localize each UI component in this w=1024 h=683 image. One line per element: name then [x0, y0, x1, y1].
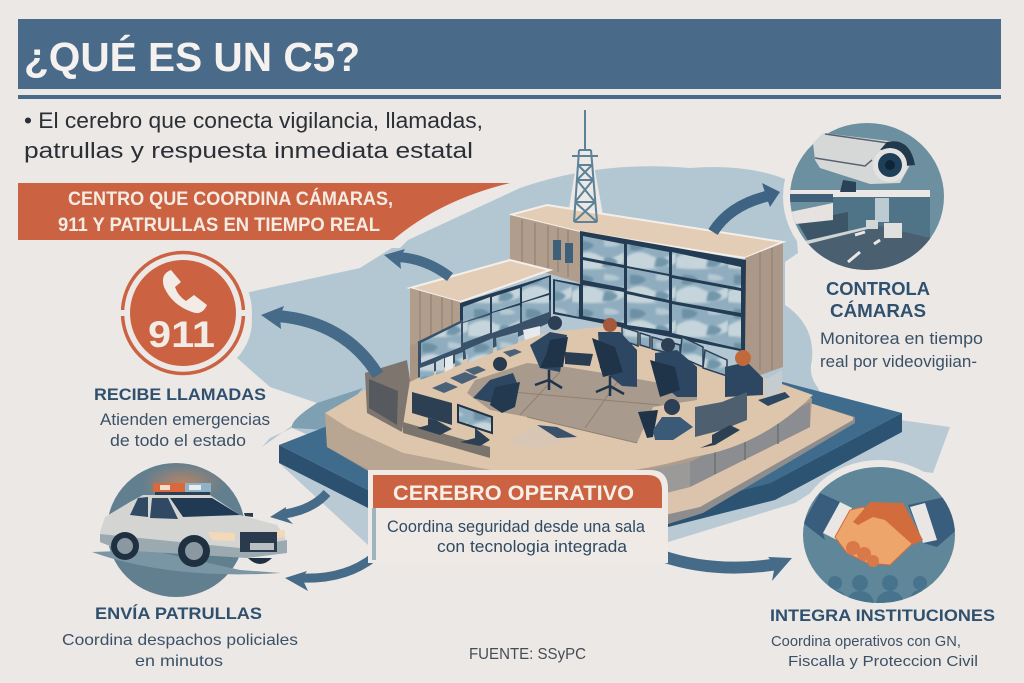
icon: 911 phone	[114, 244, 252, 382]
arrow: to 911	[261, 306, 378, 375]
main tall wall	[510, 205, 783, 377]
callout: cerebro operativo: CEREBRO OPERATIVO	[393, 482, 634, 505]
operator 3	[592, 318, 637, 396]
orange banner	[18, 183, 510, 240]
left console	[365, 360, 490, 458]
light blue background blob	[237, 166, 830, 447]
arrow: to patrol upper	[270, 493, 327, 524]
text: recibe llamadas: RECIBE LLAMADAS	[94, 385, 266, 404]
icon: handshake	[803, 460, 955, 603]
text: integra instituciones: Fiscalla y Proteccion Civil	[788, 653, 978, 670]
intro text: • El cerebro que conecta vigilancia, llamadas,	[24, 108, 483, 133]
text: integra instituciones	[770, 606, 995, 670]
title banner	[18, 19, 1001, 99]
text: envia patrullas: ENVÍA PATRULLAS	[95, 604, 262, 623]
left monitor grid	[420, 277, 549, 380]
callout: cerebro operativo: Coordina seguridad desde una sala	[387, 518, 646, 536]
operator 5	[725, 350, 763, 397]
operator 2	[530, 316, 568, 390]
lower step	[665, 403, 855, 525]
text: controla camaras: CÁMARAS	[830, 300, 926, 321]
callout: cerebro operativo	[368, 470, 668, 563]
text: integra instituciones: Coordina operativos con GN,	[771, 633, 961, 650]
lower left wall	[410, 260, 551, 382]
source note: FUENTE: SSyPC	[469, 646, 586, 663]
operator 6	[638, 399, 693, 440]
arrow: to cameras	[713, 183, 780, 232]
operator 1	[473, 357, 520, 413]
intro text: patrullas y respuesta inmediata estatal	[24, 138, 473, 163]
text: recibe llamadas	[94, 385, 270, 450]
center desk underside	[565, 352, 593, 366]
title banner: ¿QUÉ ES UN C5?	[24, 34, 360, 80]
orange banner: CENTRO QUE COORDINA CÁMARAS,	[68, 188, 393, 210]
text: envia patrullas: Coordina despachos policiales	[62, 632, 298, 649]
control room floor	[467, 363, 697, 443]
desk monitors back row	[622, 327, 727, 376]
operator 4	[650, 338, 697, 397]
text: envia patrullas: en minutos	[135, 653, 223, 670]
text: controla camaras: CONTROLA	[826, 279, 930, 299]
text: envia patrullas	[62, 604, 298, 670]
mid blue platform shadow	[292, 388, 363, 430]
blob cut near tower	[568, 165, 603, 215]
icon: patrol car	[92, 463, 287, 597]
text: integra instituciones: INTEGRA INSTITUCIONES	[770, 606, 995, 625]
intro text	[24, 108, 483, 163]
callout: cerebro operativo: con tecnologia integrada	[437, 538, 628, 556]
text: recibe llamadas: Atienden emergencias	[100, 411, 270, 429]
front monitors	[412, 370, 790, 448]
dark blue base slab	[279, 382, 902, 527]
desk keyboards	[432, 349, 522, 393]
text: controla camaras	[820, 279, 983, 371]
arrow: to institutions	[662, 556, 792, 581]
slab shadows	[279, 420, 950, 545]
arrow: top left	[384, 249, 450, 277]
text: recibe llamadas: de todo el estado	[110, 432, 246, 450]
white cut-out at banner	[10, 176, 530, 248]
arrow: to patrol lower	[285, 557, 374, 591]
orange banner: 911 Y PATRULLAS EN TIEMPO REAL	[58, 215, 380, 236]
icon: security camera	[783, 123, 944, 270]
wall monitor grid	[553, 231, 746, 352]
tan deck	[325, 325, 813, 500]
text: controla camaras: Monitorea en tiempo	[820, 330, 983, 348]
text: controla camaras: real por videovigiian-	[820, 353, 977, 371]
icon: 911 phone: 911	[148, 314, 215, 355]
communications tower	[572, 110, 598, 222]
